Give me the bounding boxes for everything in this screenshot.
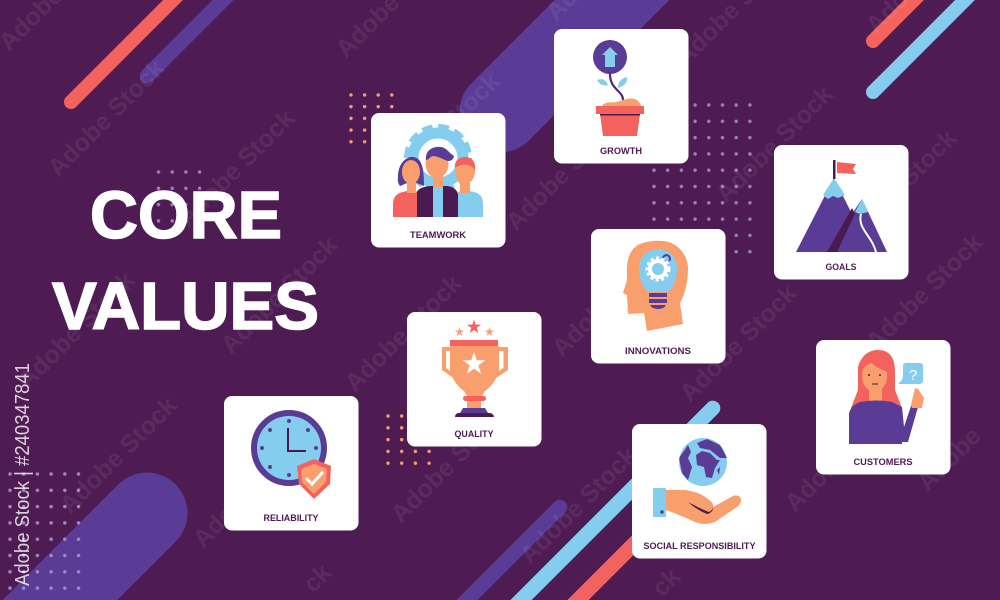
label: SOCIAL RESPONSIBILITY (644, 541, 756, 552)
panel: teamwork (371, 113, 506, 248)
stock watermarks: Adobe Stock (546, 234, 674, 362)
stock watermarks: Adobe Stock (187, 425, 315, 553)
stock watermarks: Adobe Stock (215, 231, 343, 359)
icon: woman with question bubble: ? (909, 367, 917, 384)
stock watermarks: Adobe Stock (514, 441, 642, 569)
title (52, 178, 319, 344)
stock watermarks: Adobe Stock (834, 124, 962, 252)
stock watermarks: Adobe Stock (42, 54, 170, 182)
panel: reliability (224, 396, 358, 530)
panel: quality (407, 312, 542, 446)
panel: customers (816, 340, 950, 474)
label: TEAMWORK (410, 230, 466, 241)
icon: clock and shield (254, 413, 331, 499)
stock watermarks: Adobe Stock (54, 391, 182, 519)
stock watermarks: ck (298, 559, 337, 598)
title: CORE (90, 178, 282, 253)
icon: head with lightbulb (623, 241, 688, 331)
title: VALUES (52, 269, 319, 344)
stock watermarks: Adobe Stock (377, 67, 505, 195)
stock watermarks: Adobe Stock (12, 266, 140, 394)
stock watermarks: Adobe Stock (339, 269, 467, 397)
stock watermarks: Adobe (912, 422, 987, 497)
icon: plant in pot (593, 40, 644, 136)
label: GOALS (826, 262, 856, 273)
label: RELIABILITY (264, 513, 319, 524)
icon: trophy (442, 320, 508, 417)
icon: team and gear (393, 126, 483, 217)
panel: goals (774, 145, 908, 280)
icon: mountain with flag (796, 160, 887, 252)
stock watermarks: Adobe Stock (710, 80, 838, 208)
icon: hand holding globe (653, 438, 741, 524)
stock watermarks: Adobe Stock (779, 389, 907, 517)
panel: growth (554, 29, 688, 164)
stock watermarks: Adobe Stock (500, 108, 628, 236)
panel: innovations (591, 229, 726, 364)
dot grids (3, 89, 757, 597)
stock id: Adobe Stock | #240347841 (12, 363, 34, 586)
label: GROWTH (600, 146, 642, 157)
panel: social responsibility (632, 424, 766, 558)
label: CUSTOMERS (854, 457, 912, 468)
stock watermarks: Adobe Stock (172, 104, 300, 232)
label: QUALITY (454, 429, 494, 440)
stock watermarks: Adobe Stock (860, 228, 988, 356)
label: INNOVATIONS (625, 346, 691, 357)
stock watermarks: Adobe Stock (674, 279, 802, 407)
stock watermarks: Adobe Stock (385, 400, 513, 528)
